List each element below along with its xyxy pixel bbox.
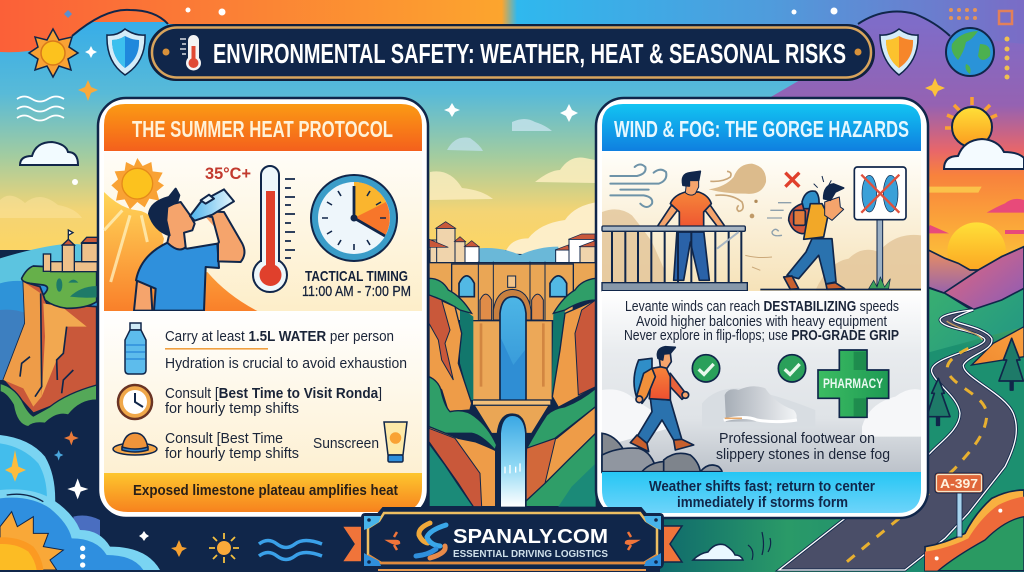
- text: 35C+: 35°C+: [205, 164, 251, 183]
- rainbow hill: [925, 490, 1024, 571]
- text: footwear: [716, 430, 890, 463]
- icon: globe: [946, 28, 994, 76]
- figure: hiker: [784, 184, 845, 289]
- text: tactical timing: [302, 268, 411, 300]
- icon: pine trees: [927, 338, 1023, 425]
- landscape: center gorge and Puente Nuevo bridge: [429, 202, 600, 508]
- text: consult 1: Consult [Best Time to Visit Ronda]: [165, 385, 382, 402]
- title banner: [149, 25, 874, 80]
- road sign A-397: [935, 473, 983, 537]
- lower section background: [602, 291, 921, 473]
- right lower foliage: [527, 388, 596, 448]
- landscape: right sunset, hills, road: [660, 187, 1024, 572]
- icon: small cloud left: [20, 142, 78, 165]
- callout: weather shifts: [602, 472, 921, 513]
- walkway and lower span: [472, 400, 551, 405]
- masonry: [429, 263, 596, 293]
- icon: thermometer: [253, 166, 295, 292]
- icon: wind waves left: [17, 96, 64, 120]
- left lower foliage: [429, 377, 497, 450]
- text: wind rules: Never explore in flip-flops; use PRO-GRADE GRIP: [624, 328, 899, 344]
- road sign A-397: A-397: [940, 476, 978, 491]
- icon: water bottle: [125, 323, 146, 374]
- panel header: [602, 104, 921, 151]
- text: consult 2: Consult [Best Time: [165, 430, 283, 447]
- text: wind rules: Levante winds can reach DESTABILIZING speeds: [625, 299, 899, 315]
- logo tagline: ESSENTIAL DRIVING LOGISTICS: [453, 548, 608, 560]
- icon: sun and cloud right: [944, 97, 1024, 169]
- logo text: SPANALY.COM: [453, 526, 608, 548]
- illustration: man drinking with sun, thermometer, clock: [104, 152, 422, 311]
- decoration: top-left sun icon: [29, 29, 78, 77]
- railing: [602, 226, 747, 291]
- text: sunscreen: Sunscreen: [313, 435, 379, 452]
- icon: thermometer in title: [180, 35, 201, 70]
- icon: check 1: [692, 355, 720, 382]
- star shapes: [5, 450, 26, 482]
- grass strokes: [748, 532, 771, 560]
- figure: man with bottle: [134, 189, 244, 311]
- fog clouds: [602, 389, 675, 447]
- panel header: THE SUMMER HEAT PROTOCOL: [132, 116, 393, 142]
- sign: no flip-flops: [854, 167, 906, 289]
- side arches: [459, 276, 474, 297]
- town: [43, 243, 98, 272]
- panel: summer heat protocol: [98, 98, 428, 518]
- waterfall: [497, 413, 527, 508]
- wind dashes: [767, 203, 791, 236]
- rocks: [602, 433, 722, 472]
- text: consult 2: [165, 430, 299, 462]
- text: water: Carry at least 1.5L WATER per person: [165, 328, 394, 345]
- icon: small cloud bottom: [693, 544, 743, 560]
- ribbon tails: [342, 526, 682, 562]
- teal shadows: [460, 307, 473, 400]
- icon: sunscreen tube: [384, 422, 407, 462]
- cliff: [3, 282, 97, 413]
- decoration: dots and square top-right: [949, 8, 1012, 80]
- illustration: gorge hazards: [602, 152, 921, 291]
- text: footwear: slippery stones in dense fog: [716, 446, 890, 463]
- road: [779, 310, 1016, 570]
- text: footwear: Professional footwear on: [719, 430, 875, 447]
- callout: limestone plateau: [104, 473, 422, 512]
- figure: man on balcony: [657, 171, 725, 280]
- icon: wind lines: [610, 164, 666, 207]
- icon: orange shield: [880, 29, 918, 75]
- icon: S logo: [416, 523, 446, 558]
- icon: brown clock: [118, 385, 152, 419]
- panel header: WIND & FOG: THE GORGE HAZARDS: [614, 116, 909, 142]
- text: consult 1: for hourly temp shifts: [165, 400, 299, 417]
- text: wind rules: Avoid higher balconies with heavy equipment: [636, 314, 887, 330]
- sun: [0, 512, 63, 570]
- decoration: sparkles: [64, 8, 945, 185]
- logo plaque: spanaly.com: [362, 508, 663, 571]
- divider: [165, 348, 268, 350]
- left upper foliage and cliff: [429, 278, 472, 313]
- callout: weather shifts: Weather shifts fast; return to center: [649, 478, 875, 495]
- icon: pharmacy cross: [818, 350, 889, 417]
- illustration: fog with hiker, shoe, pharmacy: [602, 347, 921, 472]
- landscape: left cliff with town: [0, 230, 160, 570]
- icon: blue shield: [107, 29, 145, 75]
- text: consult 2: for hourly temp shifts: [165, 445, 299, 462]
- text: wind rules: [624, 299, 899, 344]
- figure: hiker on rocks: [630, 347, 694, 452]
- main arch: [493, 289, 531, 320]
- icon: red X: [785, 173, 799, 187]
- foliage: [0, 383, 97, 427]
- list section background: [104, 311, 422, 473]
- text: hydration: Hydration is crucial to avoid exhaustion: [165, 355, 407, 372]
- town left and right: [430, 228, 595, 263]
- panel: wind and fog: [596, 98, 928, 518]
- right upper foliage and cliff: [553, 278, 596, 313]
- icon: dust cloud: [709, 164, 766, 218]
- text: tactical timing: 11:00 AM - 7:00 PM: [302, 283, 411, 300]
- text: pharmacy: PHARMACY: [823, 375, 883, 391]
- callout: weather shifts: immediately if storms form: [677, 494, 848, 511]
- text: consult 1: [165, 385, 382, 417]
- callout: limestone plateau: Exposed limestone plateau amplifies heat: [133, 482, 398, 499]
- icon: hat: [113, 433, 157, 455]
- plateau: [22, 266, 97, 308]
- text: tactical timing: TACTICAL TIMING: [305, 268, 408, 285]
- icon: sun: [111, 158, 164, 209]
- decoration: bottom strip icons: [139, 531, 322, 563]
- icon: clock: [311, 175, 397, 261]
- blue clouds: [0, 435, 55, 533]
- panel header: [104, 104, 422, 151]
- icon: shoe: [724, 386, 797, 422]
- icon: check 2: [778, 355, 806, 382]
